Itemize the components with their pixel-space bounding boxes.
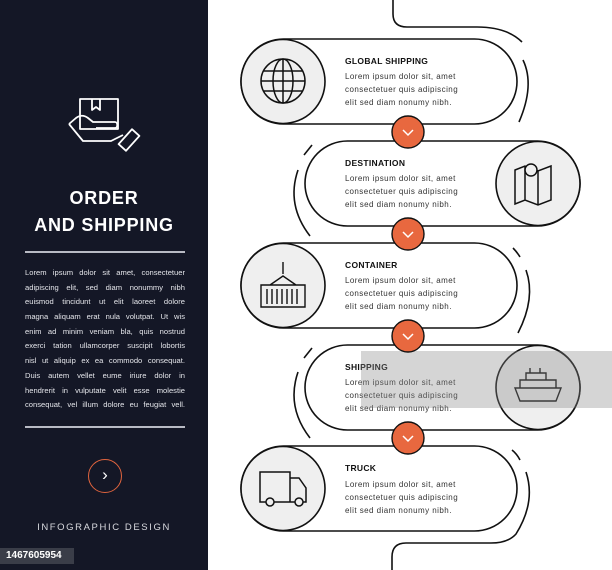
step 1: elit sed diam nonumy nibh. bbox=[345, 98, 452, 107]
step 4 bbox=[305, 345, 580, 430]
text block: body: Lorem ipsum dolor sit amet, consectetuer bbox=[25, 268, 185, 277]
watermark band bbox=[361, 351, 612, 408]
text block: body: nisl ut aliquip ex ea commodo consequat. bbox=[25, 356, 185, 365]
step 1: Lorem ipsum dolor sit, amet bbox=[345, 72, 456, 81]
step 1 bbox=[241, 39, 517, 124]
text block: body: consequat, vel illum dolore eu feugiat vell. bbox=[25, 400, 185, 409]
text block: body: magna aliquam erat nula volutpat. Ut wis bbox=[25, 312, 185, 321]
title: ORDER bbox=[69, 188, 138, 208]
title bbox=[34, 188, 174, 235]
step 2: consectetuer quis adipiscing bbox=[345, 187, 458, 196]
text block: body: Duis autem vellet eume iriure dolor in bbox=[25, 371, 185, 380]
text block: body: exerci tation ullamcorper suscipit lobortis bbox=[25, 341, 185, 350]
text: infographic design: INFOGRAPHIC DESIGN bbox=[37, 522, 171, 533]
step 2: elit sed diam nonumy nibh. bbox=[345, 200, 452, 209]
step 2: Lorem ipsum dolor sit, amet bbox=[345, 174, 456, 183]
title: AND SHIPPING bbox=[34, 215, 174, 235]
text block: body: enim ad minim veniam bla, quis nostrud bbox=[25, 327, 185, 336]
step 4: consectetuer quis adipiscing bbox=[345, 391, 458, 400]
icon: hand with box bbox=[68, 98, 140, 152]
badge: id: 1467605954 bbox=[6, 550, 62, 561]
step 1: consectetuer quis adipiscing bbox=[345, 85, 458, 94]
step 2 bbox=[305, 141, 580, 226]
icon: arrow button: › bbox=[102, 465, 108, 484]
text block: body: hendrerit in vulputate velit esse molestie bbox=[25, 386, 185, 394]
text block: body: adipiscing elit, sed diam nonummy nibh bbox=[25, 283, 185, 292]
text block: body: euismod tincidunt ut elit laoreet dolore bbox=[25, 297, 185, 306]
step 5: consectetuer quis adipiscing bbox=[345, 493, 458, 502]
step 2: DESTINATION bbox=[345, 158, 405, 168]
badge: id bbox=[0, 548, 74, 564]
arrows: connectors bbox=[392, 116, 424, 454]
step 3: consectetuer quis adipiscing bbox=[345, 289, 458, 298]
step 5: elit sed diam nonumy nibh. bbox=[345, 506, 452, 515]
step 5: Lorem ipsum dolor sit, amet bbox=[345, 480, 456, 489]
step 3 bbox=[241, 243, 517, 328]
step 4: elit sed diam nonumy nibh. bbox=[345, 404, 452, 413]
icon: arrow button bbox=[88, 459, 122, 493]
panel: left sidebar bbox=[0, 0, 208, 570]
step 3: CONTAINER bbox=[345, 260, 398, 270]
step 3: Lorem ipsum dolor sit, amet bbox=[345, 276, 456, 285]
step 3: elit sed diam nonumy nibh. bbox=[345, 302, 452, 311]
step 4: Lorem ipsum dolor sit, amet bbox=[345, 378, 456, 387]
step 5 bbox=[241, 446, 517, 531]
step 4: SHIPPING bbox=[345, 362, 388, 372]
text block: body bbox=[25, 268, 185, 409]
step 5: TRUCK bbox=[345, 463, 377, 473]
step 1: GLOBAL SHIPPING bbox=[345, 56, 428, 66]
